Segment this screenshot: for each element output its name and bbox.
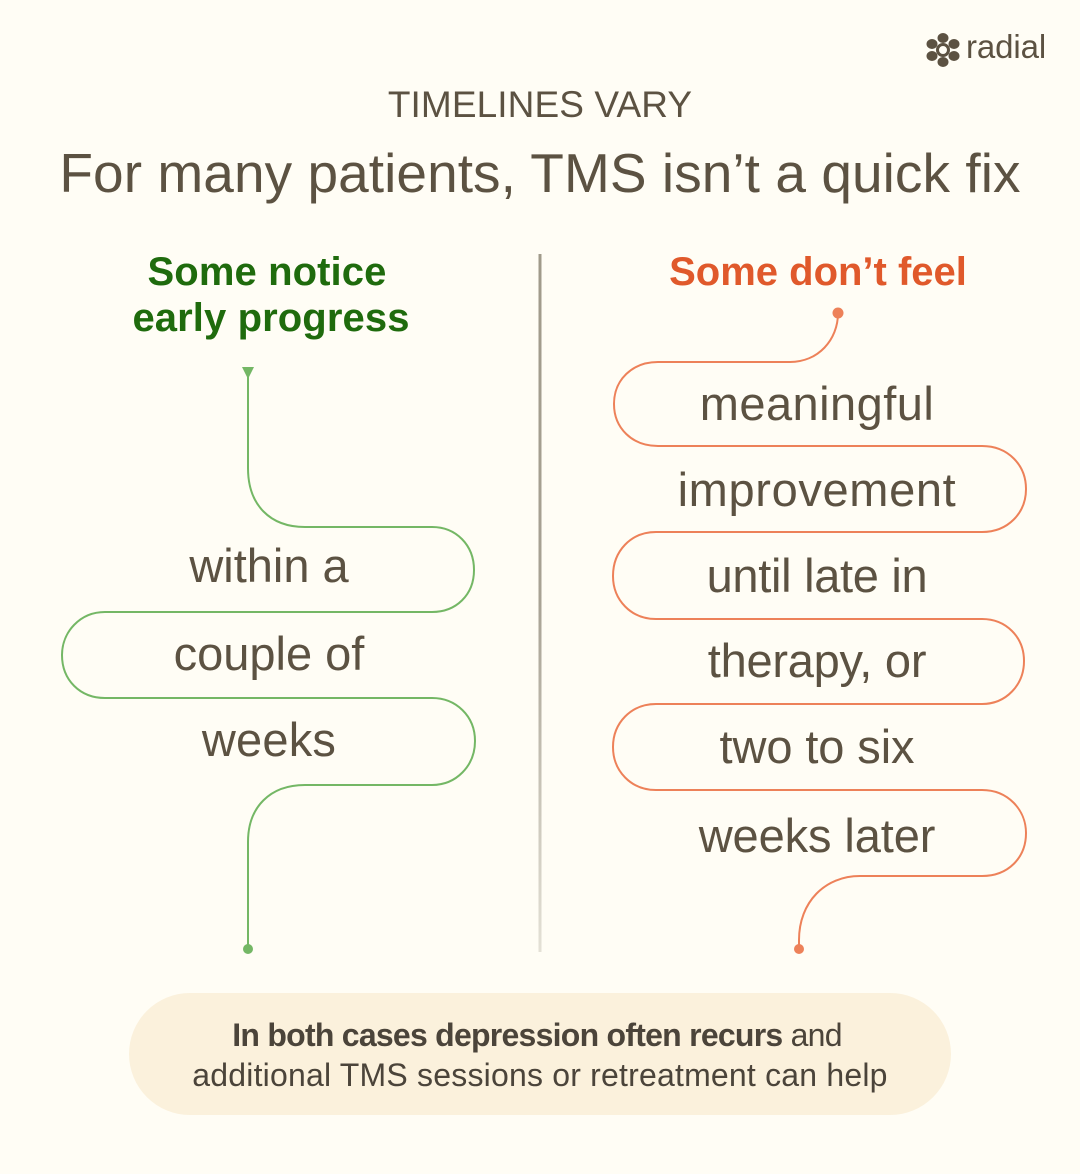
title: For many patients, TMS isn’t a quick fix: [59, 142, 1021, 204]
icon: radial flower: [926, 33, 960, 67]
right panel: late response: until late in: [707, 549, 927, 602]
left panel: early progress: [61, 250, 476, 954]
callout text: In both cases depression often recurs and: [232, 1017, 842, 1053]
logo: radial: [926, 28, 1046, 67]
right panel: late response: [612, 250, 1027, 954]
callout: [129, 993, 951, 1115]
left heading: early progress: [132, 296, 410, 340]
left winding line: [61, 367, 476, 954]
left heading: [132, 250, 410, 340]
callout text: additional TMS sessions or retreatment can help: [192, 1057, 888, 1093]
left panel: early progress: weeks: [202, 713, 336, 766]
right winding text: meaningful: [700, 377, 934, 430]
callout text: [192, 1017, 888, 1093]
right panel: late response: weeks later: [699, 809, 935, 862]
right winding line: [612, 308, 1027, 954]
right panel: late response: improvement: [678, 463, 956, 516]
eyebrow heading: TIMELINES VARY: [388, 84, 692, 125]
left winding text: within a: [189, 539, 349, 592]
right panel: late response: therapy, or: [708, 634, 926, 687]
right panel: late response: two to six: [720, 720, 914, 773]
left heading: Some notice: [148, 250, 386, 294]
logo wordmark: radial: [966, 28, 1046, 65]
right heading: Some don’t feel: [669, 250, 967, 294]
left panel: early progress: couple of: [174, 627, 364, 680]
